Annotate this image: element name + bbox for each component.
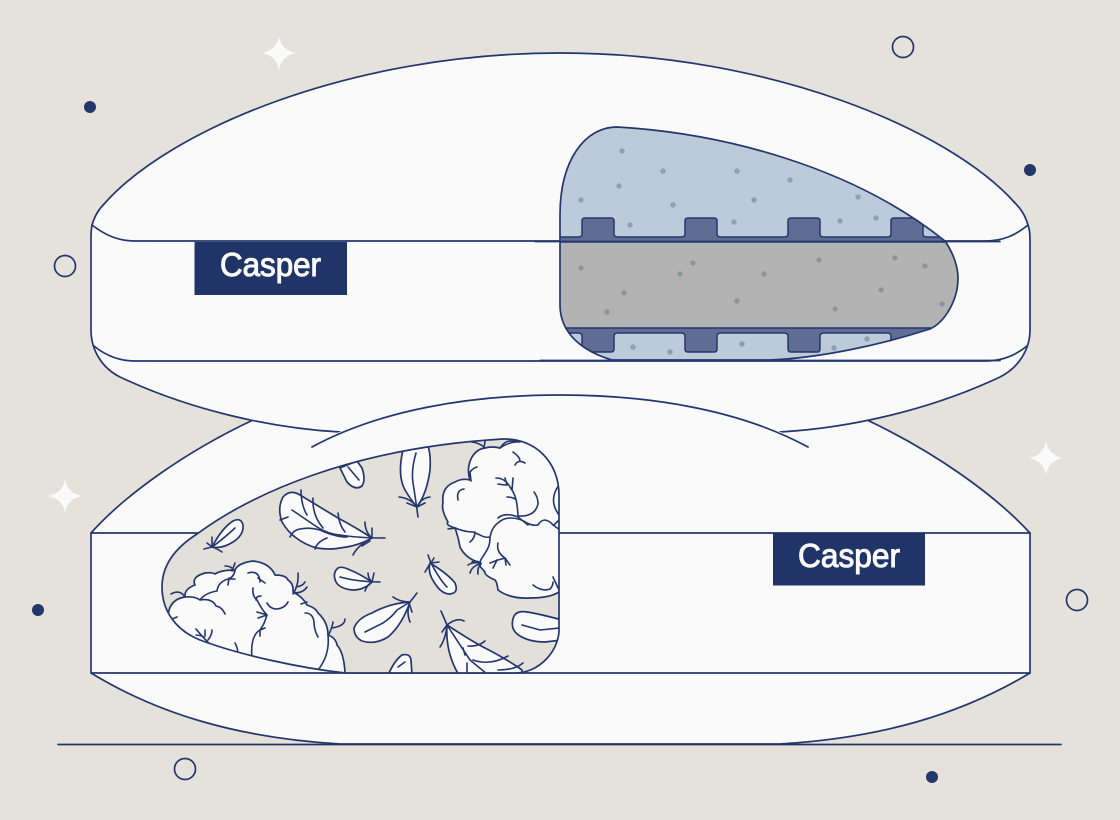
feather: right: [512, 612, 562, 642]
feather and cotton cutaway: [160, 439, 570, 680]
ground line: [58, 744, 1061, 746]
cotton: upper right: [443, 441, 570, 598]
cotton: lower left: [160, 561, 345, 680]
lower pillow front flap: [312, 395, 808, 520]
feather: large: [280, 490, 385, 555]
sparkle stars: [48, 36, 1063, 513]
top label: [194, 242, 347, 295]
feather: lower centre: [354, 593, 417, 642]
feather: small upper left: [204, 520, 243, 552]
bottom label: Casper: [798, 537, 900, 574]
top label: Casper: [220, 246, 321, 283]
lower pillow: [91, 420, 1030, 744]
feather: vertical: [399, 446, 430, 517]
bottom label: [773, 533, 925, 586]
feather: small diagonal: [425, 555, 456, 594]
feather: top stub: [340, 461, 364, 488]
feather: bottom stub: [389, 655, 412, 675]
feather: small centre: [334, 567, 380, 591]
solid dots: [32, 101, 1036, 783]
top pillow: [91, 53, 1030, 438]
foam cutaway: [535, 120, 1000, 365]
feather: large lower: [440, 611, 523, 680]
